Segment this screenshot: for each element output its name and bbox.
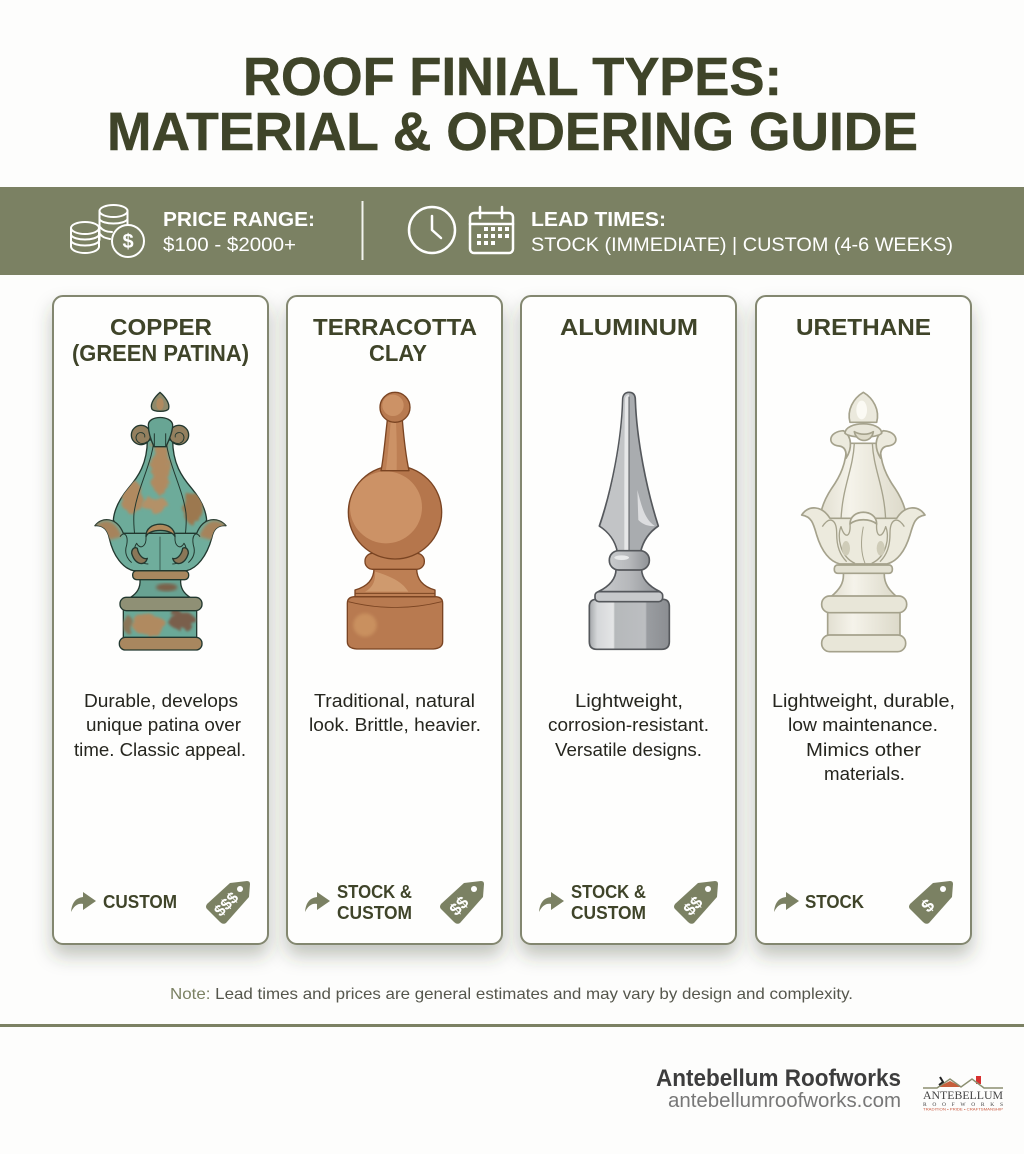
- panel: urethane: [756, 296, 971, 944]
- lead times text: STOCK (IMMEDIATE) | CUSTOM (4-6 WEEKS): [531, 235, 953, 256]
- description: terracotta clay: look. Brittle, heavier.: [309, 714, 481, 735]
- description: aluminum: Versatile designs.: [555, 739, 702, 760]
- heading: aluminum: ALUMINUM: [560, 314, 698, 340]
- lead times text: LEAD TIMES:: [531, 209, 666, 231]
- title: MATERIAL & ORDERING GUIDE: [107, 102, 918, 162]
- ordering: stock and custom: STOCK &: [337, 881, 412, 902]
- logo: ROOFWORKS: [923, 1102, 1003, 1108]
- ordering: stock and custom: CUSTOM: [337, 902, 412, 923]
- description: copper: time. Classic appeal.: [74, 739, 246, 760]
- footer brand text: Antebellum Roofworks: [656, 1065, 901, 1092]
- title: [107, 47, 918, 162]
- footer brand text: [656, 1065, 901, 1112]
- logo: ANTEBELLUM: [923, 1090, 1003, 1102]
- ordering: custom: CUSTOM: [103, 891, 177, 912]
- heading: urethane: URETHANE: [796, 314, 931, 340]
- price tag: $$: [674, 881, 718, 924]
- lead times text: [531, 209, 953, 256]
- heading: copper: COPPER: [110, 314, 212, 340]
- note: Note: Lead times and prices are general estimates and may vary by design and complexity.: [170, 986, 853, 1003]
- heading: copper: (GREEN PATINA): [72, 340, 249, 366]
- info band: [0, 187, 1024, 275]
- icon: terracotta finial: [346, 392, 444, 650]
- panel: copper: [53, 296, 268, 944]
- price tag: $$$: [206, 881, 250, 924]
- price tag: $$: $$: [446, 892, 473, 920]
- price range text: $100 - $2000+: [163, 235, 296, 256]
- price range text: [163, 209, 315, 256]
- ordering: stock: [774, 891, 865, 912]
- icon: clock: [409, 207, 455, 253]
- logo: TRADITION ▪ PRIDE ▪ CRAFTSMANSHIP: [923, 1108, 1004, 1112]
- price tag: $$: $$: [680, 892, 707, 920]
- price tag: $: [909, 881, 953, 924]
- price tag: $$: [440, 881, 484, 924]
- price range text: PRICE RANGE:: [163, 209, 315, 231]
- description: aluminum: [548, 690, 709, 760]
- ordering: stock and custom: STOCK &: [571, 881, 646, 902]
- icon: calendar: [470, 207, 513, 253]
- ordering: stock: STOCK: [805, 891, 865, 912]
- ordering: stock and custom: [539, 881, 646, 923]
- description: copper: unique patina over: [86, 714, 241, 735]
- description: copper: Durable, develops: [84, 690, 238, 711]
- description: urethane: Lightweight, durable,: [772, 690, 955, 711]
- description: terracotta clay: Traditional, natural: [314, 690, 475, 711]
- ordering: custom: [71, 891, 177, 912]
- panel: aluminum: [521, 296, 736, 944]
- price tag: $: $: [917, 895, 938, 916]
- ordering: stock and custom: [305, 881, 412, 923]
- description: urethane: [772, 690, 955, 784]
- heading: terracotta clay: TERRACOTTA: [313, 314, 477, 340]
- panel: terracotta clay: [287, 296, 502, 944]
- footer brand text: antebellumroofworks.com: [668, 1090, 901, 1112]
- icon: coins and dollar: [71, 205, 144, 257]
- description: aluminum: corrosion-resistant.: [548, 714, 709, 735]
- description: urethane: Mimics other: [806, 739, 921, 760]
- ordering: stock and custom: CUSTOM: [571, 902, 646, 923]
- price tag: $$$: $$$: [211, 889, 242, 920]
- icon: copper finial: [94, 392, 227, 651]
- description: urethane: materials.: [824, 763, 905, 784]
- heading: terracotta clay: CLAY: [369, 340, 427, 366]
- icon: coins and dollar: $: [122, 231, 134, 253]
- heading: terracotta clay: [313, 314, 477, 366]
- description: copper: [74, 690, 246, 760]
- title: ROOF FINIAL TYPES:: [243, 47, 782, 107]
- description: urethane: low maintenance.: [788, 714, 938, 735]
- description: terracotta clay: [309, 690, 481, 735]
- description: aluminum: Lightweight,: [575, 690, 683, 711]
- logo: [923, 1076, 1004, 1112]
- heading: copper: [72, 314, 249, 366]
- icon: aluminum finial: [588, 392, 670, 650]
- icon: urethane finial: [800, 392, 926, 652]
